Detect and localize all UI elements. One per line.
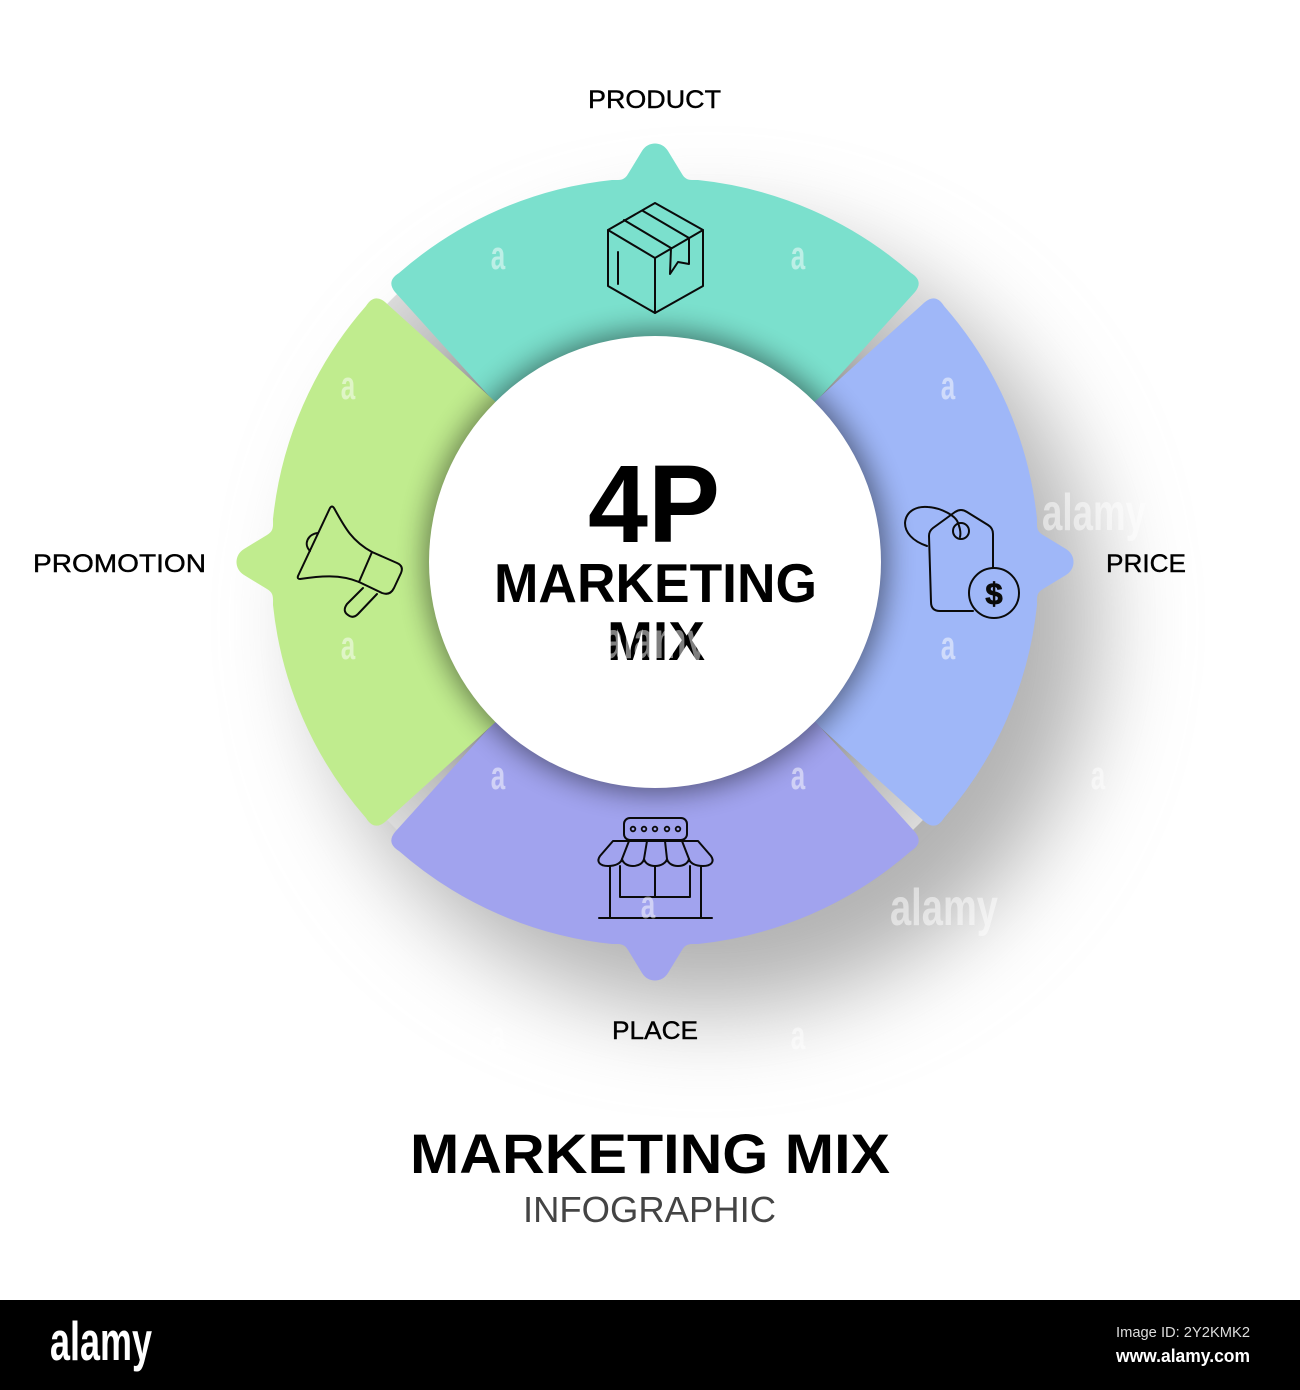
footer logo: alamy <box>50 1310 152 1372</box>
watermark pattern: a <box>341 363 355 408</box>
icon: storefront <box>598 818 713 918</box>
watermark pattern: a <box>491 753 505 798</box>
label: place: PLACE <box>612 1017 698 1045</box>
watermark pattern: a <box>791 233 805 278</box>
dollar sign: $ <box>985 576 1003 611</box>
image id: Image ID: 2Y2KMK2 <box>1116 1324 1250 1341</box>
inner circle shadow <box>425 331 887 793</box>
gap shading between segments <box>283 190 1027 934</box>
label: promotion: PROMOTION <box>33 550 206 578</box>
center heading: 4P: 4P <box>588 443 720 566</box>
watermark pattern: alamy <box>603 612 707 670</box>
label: price: PRICE <box>1106 550 1186 578</box>
center heading: mix: MIX <box>607 610 705 672</box>
icon: megaphone <box>298 506 402 617</box>
watermark pattern: alamy <box>1042 484 1146 542</box>
label: product: PRODUCT <box>588 86 721 114</box>
segment: product <box>391 144 919 417</box>
icon: cardboard box <box>608 203 703 313</box>
watermark pattern: a <box>491 1013 505 1058</box>
subtitle: INFOGRAPHIC <box>523 1189 776 1230</box>
watermark pattern: a <box>941 623 955 668</box>
watermark pattern <box>341 233 1146 1058</box>
watermark pattern: a <box>341 623 355 668</box>
chart: four segment ring <box>236 144 1074 980</box>
watermark pattern: a <box>791 753 805 798</box>
segment: price <box>800 298 1074 826</box>
segment: place <box>391 707 919 980</box>
watermark pattern: alamy <box>890 879 998 937</box>
title: MARKETING MIX <box>410 1122 890 1185</box>
watermark pattern: a <box>1091 753 1105 798</box>
icon: price tag <box>905 507 1019 618</box>
center heading: marketing: MARKETING <box>494 552 817 614</box>
watermark pattern: a <box>791 1013 805 1058</box>
center circle <box>429 336 881 788</box>
ring drop shadow <box>320 234 1096 1010</box>
watermark pattern: a <box>941 363 955 408</box>
watermark pattern: a <box>491 233 505 278</box>
website: www.alamy.com <box>1115 1346 1250 1366</box>
segment: promotion <box>236 298 510 826</box>
footer bar <box>0 1300 1300 1390</box>
watermark pattern: a <box>641 882 655 927</box>
